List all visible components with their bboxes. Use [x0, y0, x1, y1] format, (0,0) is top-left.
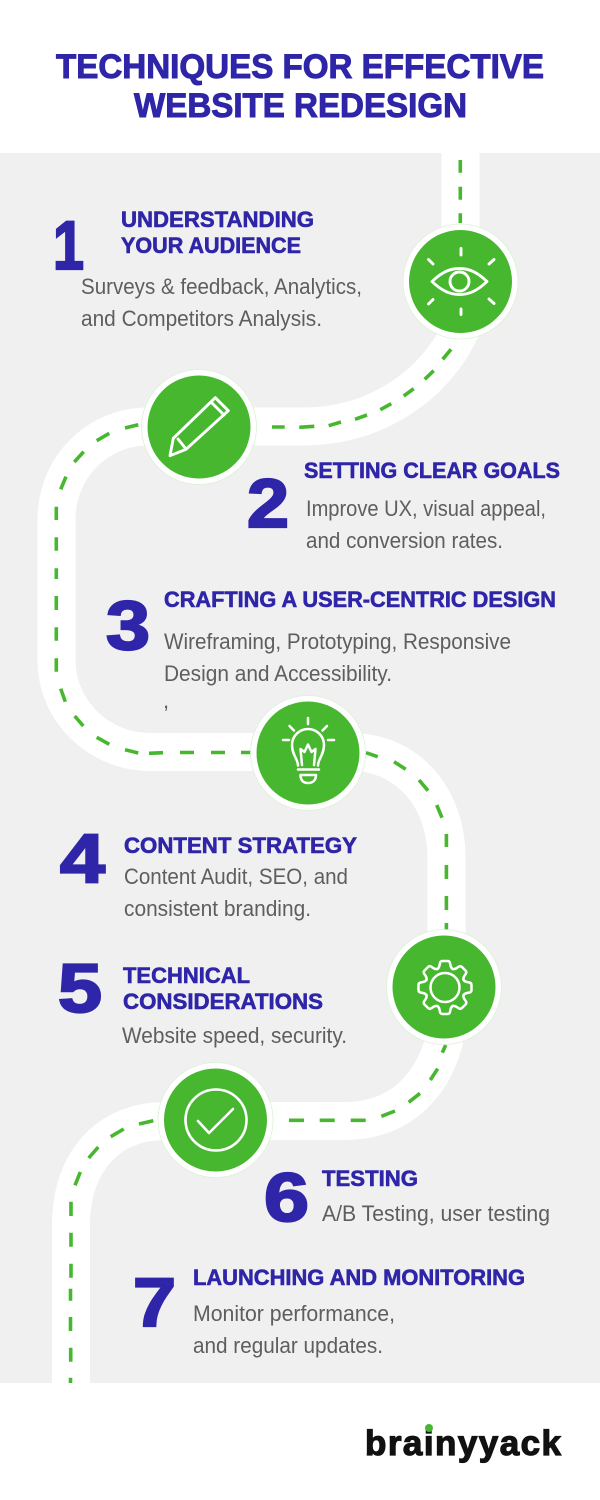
step 2: [247, 458, 560, 553]
title: TECHNIQUES FOR EFFECTIVE: [56, 48, 544, 86]
step 2: and conversion rates.: [306, 528, 503, 553]
step 5: 5: [58, 950, 102, 1027]
step 5: TECHNICAL: [123, 963, 250, 988]
step 7: [133, 1264, 525, 1358]
step 5: CONSIDERATIONS: [123, 989, 323, 1014]
title: [56, 48, 544, 125]
step 4: consistent branding.: [124, 896, 311, 921]
step 6: A/B Testing, user testing: [322, 1201, 550, 1226]
step 2: Improve UX, visual appeal,: [306, 496, 546, 521]
step 1: UNDERSTANDING: [121, 207, 314, 232]
winding road: [56, 153, 461, 1383]
step 7: 7: [133, 1264, 176, 1341]
step 3: CRAFTING A USER-CENTRIC DESIGN: [164, 587, 556, 612]
step 6: [264, 1159, 550, 1236]
step 3: [106, 587, 556, 713]
step 5: [58, 950, 347, 1048]
step 3: 3: [106, 587, 150, 664]
step 7: Monitor performance,: [193, 1301, 395, 1326]
icon: check mark: [158, 1062, 273, 1178]
step 6: 6: [264, 1159, 309, 1236]
step 5: Website speed, security.: [122, 1023, 347, 1048]
step 7: and regular updates.: [193, 1333, 383, 1358]
step 1: and Competitors Analysis.: [81, 306, 322, 331]
step 1: [53, 207, 362, 331]
step 3: ,: [163, 688, 169, 713]
logo: brainyyack: [365, 1424, 562, 1463]
step 3: Design and Accessibility.: [164, 661, 392, 686]
step 3: Wireframing, Prototyping, Responsive: [164, 629, 511, 654]
step 1: YOUR AUDIENCE: [121, 233, 301, 258]
step 2: SETTING CLEAR GOALS: [304, 458, 560, 483]
step 1: 1: [53, 207, 84, 284]
step 2: 2: [247, 465, 289, 542]
icon: eye: [403, 224, 518, 339]
step 4: Content Audit, SEO, and: [124, 864, 348, 889]
step 1: Surveys & feedback, Analytics,: [81, 274, 362, 299]
icon: gear: [386, 930, 502, 1044]
step 6: TESTING: [322, 1166, 418, 1191]
title: WEBSITE REDESIGN: [134, 87, 467, 125]
icon: light bulb: [250, 696, 366, 810]
step 4: CONTENT STRATEGY: [124, 833, 357, 858]
step 7: LAUNCHING AND MONITORING: [193, 1265, 525, 1290]
step 4: [60, 820, 357, 921]
icon: pencil: [142, 370, 256, 484]
step 4: 4: [60, 820, 105, 897]
